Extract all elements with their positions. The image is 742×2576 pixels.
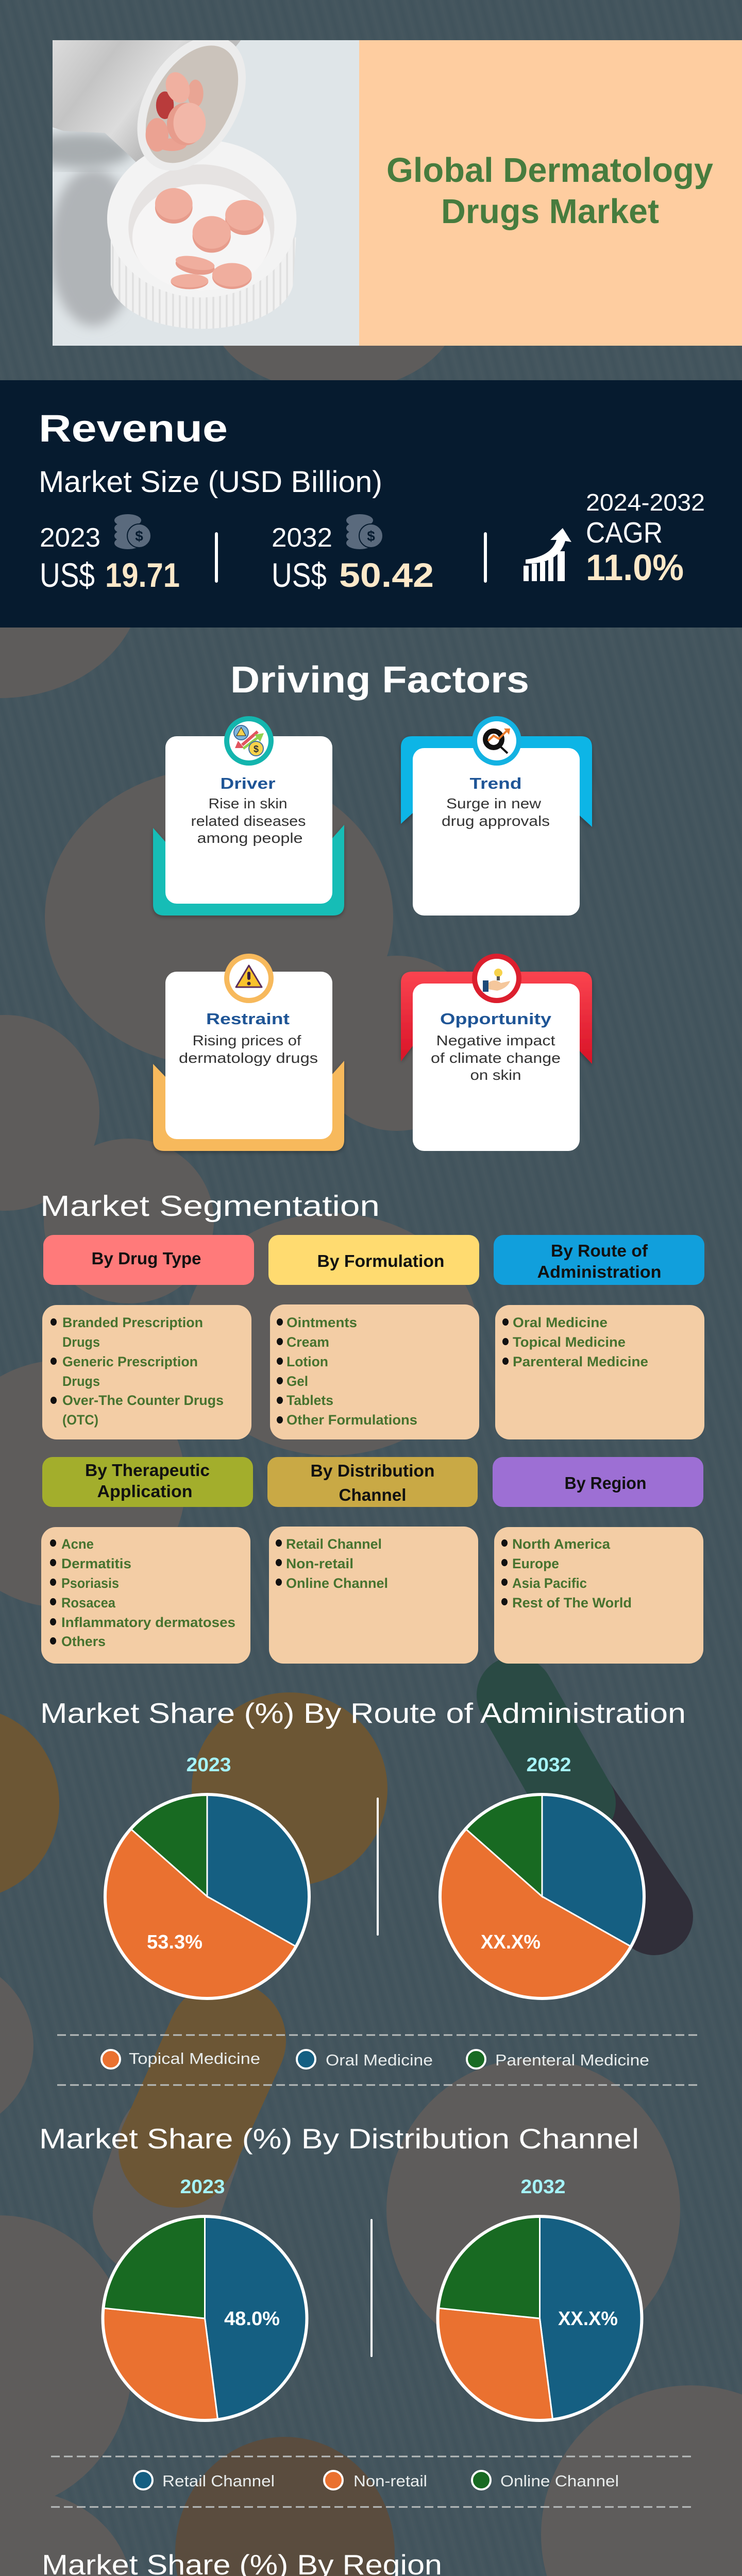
divider (215, 532, 218, 583)
2023 value: 19.71 (105, 556, 180, 594)
title panel (359, 40, 742, 346)
segment: By Region: North America (512, 1536, 611, 1552)
segment: By Therapeutic Application: Dermatitis (61, 1556, 131, 1571)
segment: By Distribution Channel: Channel (339, 1485, 406, 1504)
segment: By Route of Administration: Oral Medicine (513, 1315, 608, 1330)
segment: By Formulation (268, 1235, 479, 1439)
heading: Driving Factors: Driving Factors (230, 659, 529, 701)
2032 value (272, 523, 434, 594)
segment: By Drug Type: By Drug Type (92, 1249, 201, 1268)
segment: By Region: Asia Pacific (512, 1575, 587, 1591)
revenue panel (0, 380, 742, 628)
CAGR: 2024-2032 (586, 489, 705, 516)
segment: By Drug Type: Over-The Counter Drugs (62, 1393, 224, 1408)
icon: coins 2023: $ (135, 528, 143, 544)
pie chart: distribution 2023 (103, 2216, 307, 2420)
pie chart: route 2032 (440, 1794, 644, 1998)
segment: By Distribution Channel (267, 1457, 478, 1664)
card: Restraint: Restraint (206, 1010, 290, 1028)
segment: By Distribution Channel: Retail Channel (286, 1536, 382, 1552)
heading: Market Share By Route of Administration: Market Share (%) By Route of Administration (40, 1697, 686, 1729)
label: 2023: 2023 (187, 1754, 231, 1776)
card: Trend: drug approvals (442, 813, 550, 829)
card: Opportunity: of climate change (431, 1050, 561, 1066)
2023 value: 2023 (40, 523, 100, 553)
segment: By Route of Administration: By Route of (551, 1241, 648, 1260)
card: Trend: Trend (470, 774, 521, 792)
revenue panel: Market Size (USD Billion) (39, 465, 382, 499)
legend: distribution: Retail Channel (162, 2472, 275, 2490)
segment: By Drug Type: Generic Prescription (62, 1354, 198, 1369)
segment: By Region: Rest of The World (512, 1595, 632, 1611)
segment: By Therapeutic Application: Application (97, 1482, 193, 1501)
segment: By Route of Administration: Administration (537, 1262, 662, 1281)
icon: driver: $ (254, 744, 259, 754)
segment: By Therapeutic Application (41, 1457, 253, 1664)
title panel: Drugs Market (441, 192, 659, 231)
card: Driver: Rise in skin (208, 795, 288, 811)
2023 value (40, 523, 180, 594)
segment: By Formulation: Lotion (286, 1354, 328, 1369)
legend: route: Parenteral Medicine (495, 2051, 649, 2069)
card: Trend: Surge in new (446, 795, 542, 811)
legend: distribution: Online Channel (500, 2472, 619, 2490)
CAGR (586, 489, 705, 588)
segment: By Therapeutic Application: By Therapeutic (85, 1461, 210, 1480)
label: 2032: 2032 (527, 1754, 571, 1776)
card: Restraint (153, 954, 344, 1151)
icon: growth arrow (524, 528, 571, 581)
segment: By Route of Administration: Topical Medicine (513, 1334, 626, 1350)
2032 value: US$ (272, 556, 327, 594)
icon: driver (224, 716, 274, 766)
pie chart: distribution 2032 (437, 2216, 642, 2420)
header photo: pill bottle and cap (53, 40, 359, 346)
legend: route: Oral Medicine (326, 2051, 433, 2069)
segment: By Formulation: Cream (286, 1334, 329, 1350)
card: Opportunity: Negative impact (436, 1032, 555, 1048)
value: 53.3%: 53.3% (147, 1931, 203, 1953)
segment: By Therapeutic Application: Psoriasis (61, 1575, 119, 1591)
segment: By Therapeutic Application: Others (61, 1634, 106, 1649)
card: Driver: Driver (221, 774, 275, 792)
label: 2032: 2032 (520, 2176, 566, 2198)
segment: By Route of Administration: Parenteral Medicine (513, 1354, 648, 1369)
segment: By Region (493, 1457, 703, 1664)
divider (377, 1798, 379, 1936)
segment: By Drug Type: Drugs (62, 1374, 100, 1389)
2032 value: 50.42 (339, 556, 434, 594)
segment: By Distribution Channel: By Distribution (310, 1461, 435, 1480)
segment: By Distribution Channel: Non-retail (286, 1556, 353, 1571)
segment: By Therapeutic Application: Acne (61, 1536, 94, 1552)
divider (484, 532, 487, 583)
segment: By Formulation: Ointments (286, 1315, 357, 1330)
pie chart: route 2023 (105, 1794, 309, 1998)
icon: coins 2032: $ (367, 528, 375, 544)
segment: By Therapeutic Application: Inflammatory dermatoses (61, 1615, 235, 1630)
2032 value: 2032 (272, 523, 332, 553)
legend: route: Topical Medicine (129, 2049, 260, 2067)
segment: By Formulation: By Formulation (317, 1251, 444, 1270)
heading: Market Segmentation: Market Segmentation (40, 1190, 380, 1223)
segment: By Formulation: Other Formulations (286, 1412, 417, 1428)
label: 2023: 2023 (180, 2176, 225, 2198)
segment: By Drug Type (42, 1235, 254, 1439)
segment: By Drug Type: Drugs (62, 1334, 100, 1350)
icon: coins 2023 (114, 514, 151, 549)
title panel: Global Dermatology (386, 151, 713, 190)
card: Opportunity: on skin (470, 1067, 521, 1083)
value: XX.X%: XX.X% (481, 1931, 541, 1953)
value: 48.0%: 48.0% (224, 2308, 280, 2330)
icon: restraint (224, 954, 274, 1003)
card: Opportunity (401, 954, 592, 1151)
card: Driver: related diseases (191, 813, 306, 829)
legend: distribution (51, 2456, 695, 2507)
CAGR: 11.0% (586, 548, 684, 588)
CAGR: CAGR (586, 516, 663, 549)
card: Driver (153, 716, 344, 916)
divider (370, 2219, 373, 2357)
card: Opportunity: Opportunity (440, 1010, 552, 1028)
card: Restraint: dermatology drugs (179, 1050, 318, 1066)
segment: By Region: Europe (512, 1556, 559, 1571)
2023 value: US$ (40, 556, 95, 594)
segment: By Drug Type: Branded Prescription (62, 1315, 203, 1330)
card: Trend (401, 716, 592, 916)
heading: Market Share By Distribution Channel: Market Share (%) By Distribution Channel (39, 2123, 639, 2155)
legend: distribution: Non-retail (353, 2472, 427, 2490)
value: XX.X%: XX.X% (558, 2308, 618, 2330)
segment: By Region: By Region (565, 1473, 646, 1493)
icon: trend (472, 716, 521, 766)
segment: By Route of Administration (494, 1235, 704, 1439)
segment: By Distribution Channel: Online Channel (286, 1575, 388, 1591)
icon: coins 2032 (346, 514, 383, 549)
icon: opportunity (472, 954, 521, 1003)
card: Driver: among people (197, 830, 303, 846)
legend: route (57, 2035, 700, 2085)
card: Restraint: Rising prices of (193, 1032, 301, 1048)
segment: By Therapeutic Application: Rosacea (61, 1595, 116, 1611)
segment: By Formulation: Gel (286, 1374, 308, 1389)
segment: By Formulation: Tablets (286, 1393, 333, 1408)
revenue panel: Revenue (39, 407, 228, 450)
segment: By Drug Type: (OTC) (62, 1412, 98, 1428)
